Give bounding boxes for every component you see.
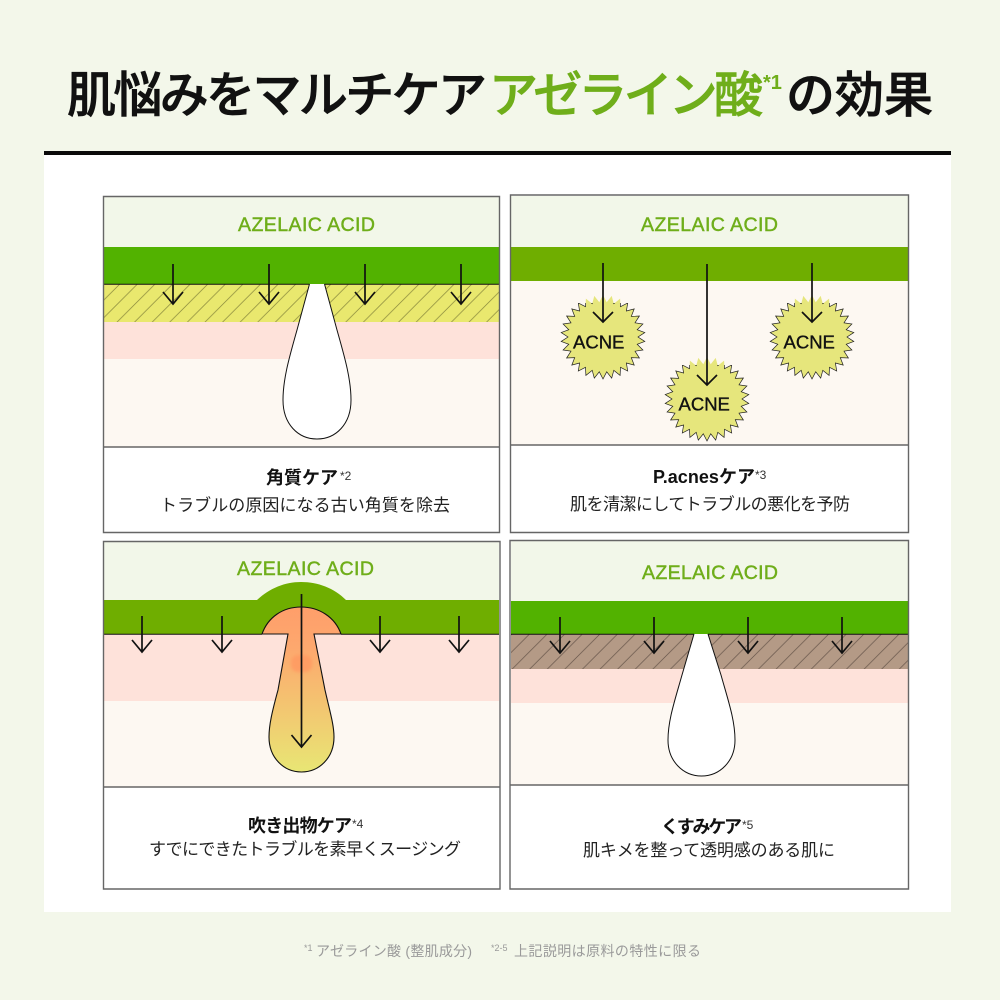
arrows: [132, 594, 469, 747]
layer: cream: [511, 281, 908, 445]
label: azelaic acid: AZELAIC ACID: [642, 562, 778, 584]
layer: pink: [511, 669, 908, 703]
title: 肌悩みをマルチケア: [67, 69, 487, 123]
layer: cream: [104, 701, 499, 787]
panel border: [104, 196, 500, 532]
caption: *2: [340, 469, 352, 483]
footnote: 上記説明は原料の特性に限る: [514, 943, 701, 959]
panel border: [104, 542, 500, 889]
pore: [668, 634, 735, 776]
caption: 角質ケア: [266, 468, 338, 488]
panel: 角質ケア: [104, 196, 500, 532]
footnote: *2-5: [491, 943, 508, 953]
layer: brown hatched: [511, 634, 908, 669]
footnote: *1: [304, 943, 313, 953]
layer: yellow hatched: [104, 284, 499, 322]
title: [67, 69, 933, 123]
arrows: [550, 617, 852, 653]
layer: green band with bump: [104, 582, 499, 634]
label: azelaic acid: AZELAIC ACID: [238, 214, 375, 236]
title: *1: [763, 72, 782, 94]
pimple: [262, 607, 341, 772]
pore: [283, 284, 351, 439]
caption: *4: [352, 817, 364, 831]
title rule: [44, 151, 951, 155]
layer: green band: [511, 601, 908, 634]
surface line: [104, 283, 499, 285]
caption: [583, 817, 835, 860]
caption: トラブルの原因になる古い角質を除去: [160, 495, 450, 515]
inflammation spots: [291, 655, 312, 672]
title: アゼライン酸: [489, 69, 763, 123]
layer: pink: [104, 634, 499, 701]
caption: *3: [755, 468, 767, 482]
layer: green band: [104, 247, 499, 284]
layer: pink: [104, 322, 499, 359]
label: azelaic acid: AZELAIC ACID: [237, 558, 374, 580]
white content area: [44, 155, 951, 912]
caption: 肌キメを整って透明感のある肌に: [583, 841, 835, 860]
acne badge 3: ACNE: [784, 332, 835, 352]
caption: *5: [742, 818, 754, 832]
caption: 吹き出物ケア: [248, 816, 352, 836]
label: azelaic acid: AZELAIC ACID: [641, 214, 778, 236]
caption: [570, 467, 850, 514]
surface line: [104, 633, 499, 635]
panel border: [510, 195, 908, 532]
caption: [149, 816, 461, 859]
footnote: [304, 943, 701, 959]
panel: 吹き出物ケア: [104, 542, 500, 889]
panel border: [510, 540, 908, 889]
arrows: [593, 263, 822, 385]
title: の効果: [786, 69, 933, 123]
layer: cream: [511, 703, 908, 785]
caption: くすみケア: [661, 817, 742, 837]
arrows: [163, 264, 471, 304]
surface line: [511, 633, 908, 635]
caption: P.acnesケア: [653, 467, 755, 487]
acne badge 1: ACNE: [573, 332, 624, 352]
acne badge 1: [561, 295, 645, 379]
layer: cream: [104, 359, 499, 447]
panel: くすみケア: [510, 540, 908, 889]
footnote: アゼライン酸 (整肌成分): [316, 943, 472, 959]
caption: [160, 468, 450, 515]
acne badge 3: [770, 295, 854, 379]
acne badge 2: ACNE: [678, 394, 730, 414]
caption: 肌を清潔にしてトラブルの悪化を予防: [570, 494, 850, 514]
layer: green band: [511, 247, 908, 281]
acne badge 2: [665, 357, 749, 441]
panel: P.acnesケア: [510, 195, 908, 532]
caption: すでにできたトラブルを素早くスージング: [149, 839, 461, 859]
